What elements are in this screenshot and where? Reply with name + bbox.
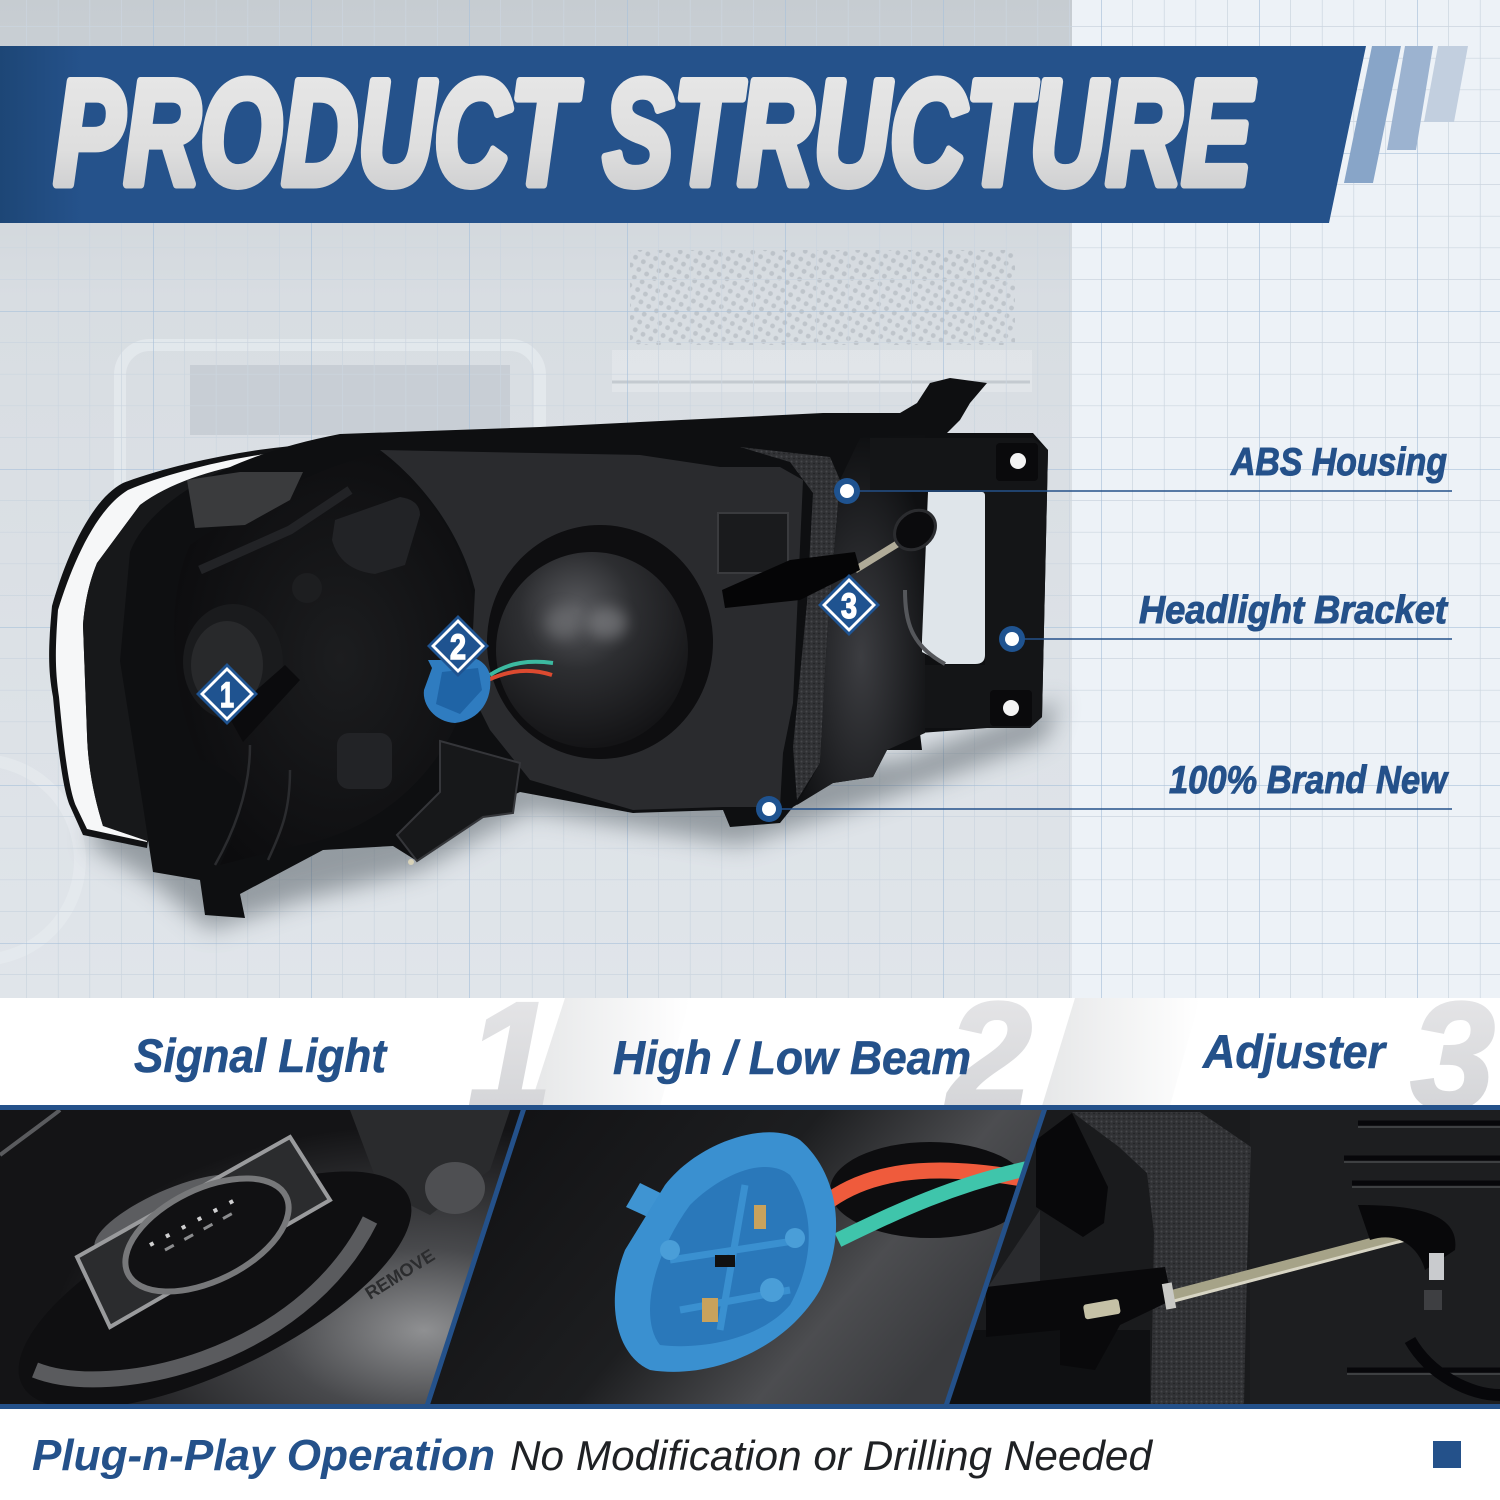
- detail photo strip: [0, 1105, 1500, 1409]
- foam strip: [740, 447, 840, 800]
- rear bracket: [870, 438, 1048, 728]
- label: Signal Light: Signal Light: [134, 1029, 388, 1082]
- callout: ABS Housing: ABS Housing: [1230, 441, 1447, 484]
- photo: signal light socket: [0, 1110, 521, 1404]
- headlight product: [49, 378, 1060, 930]
- drop shadow: [90, 700, 1060, 930]
- numbered marker 3: [818, 574, 880, 636]
- callout: ABS Housing: [834, 441, 1452, 504]
- footer description: No Modification or Drilling Needed: [510, 1432, 1154, 1479]
- label: High / Low Beam: High / Low Beam: [613, 1031, 971, 1084]
- wires: [488, 671, 552, 680]
- callout: 100% Brand New: 100% Brand New: [1169, 759, 1449, 802]
- raised arrow marking: REMOVE: [362, 1245, 438, 1303]
- bracket screw holes: [990, 443, 1038, 726]
- numbered marker 2: 2: [450, 628, 466, 667]
- photo dividers: [427, 1108, 1045, 1406]
- bulb dome: [487, 525, 713, 759]
- adjuster rod: [855, 533, 915, 570]
- signal socket: [183, 604, 283, 720]
- title banner: [0, 46, 1468, 223]
- label: Adjuster: 3: [1410, 971, 1495, 1141]
- bracket window: [922, 492, 985, 664]
- label: Adjuster: Adjuster: [1202, 1025, 1388, 1078]
- background grid paper: [0, 0, 1500, 1000]
- clear lens edge: [49, 445, 307, 848]
- photo: adjuster: [940, 1110, 1500, 1410]
- footer square: [1433, 1441, 1461, 1468]
- footer headline: Plug-n-Play Operation: [32, 1431, 495, 1480]
- label: Adjuster: [1202, 1000, 1495, 1105]
- footer band: [0, 1409, 1500, 1500]
- reflector arcs: [215, 745, 290, 865]
- lower connector: [397, 741, 520, 861]
- callout: Headlight Bracket: Headlight Bracket: [1139, 589, 1449, 632]
- numbered marker 1: 1: [220, 676, 234, 715]
- square mid housing: [380, 450, 803, 810]
- callout: 100% Brand New: [756, 759, 1452, 822]
- left bowl: [174, 452, 476, 865]
- banner accent stripes: [1344, 46, 1468, 183]
- bosses: [332, 497, 420, 574]
- numbered marker 1: [196, 663, 258, 725]
- top left connector: [187, 472, 303, 528]
- main housing: [120, 378, 1048, 918]
- photo: high low beam connector: [424, 1110, 1049, 1404]
- feature label band: [0, 998, 1500, 1105]
- blue connector: [424, 656, 490, 723]
- label: High / Low Beam: [614, 1000, 1032, 1105]
- callout: Headlight Bracket: [999, 589, 1452, 652]
- label: Signal Light: 1: [467, 971, 552, 1141]
- ghosted truck photo backdrop: [0, 0, 1500, 1000]
- rear box: [797, 435, 925, 805]
- label: Signal Light: [134, 1002, 546, 1105]
- label: High / Low Beam: 2: [944, 971, 1032, 1141]
- numbered marker 2: [427, 615, 489, 677]
- numbered marker 3: 3: [841, 587, 857, 626]
